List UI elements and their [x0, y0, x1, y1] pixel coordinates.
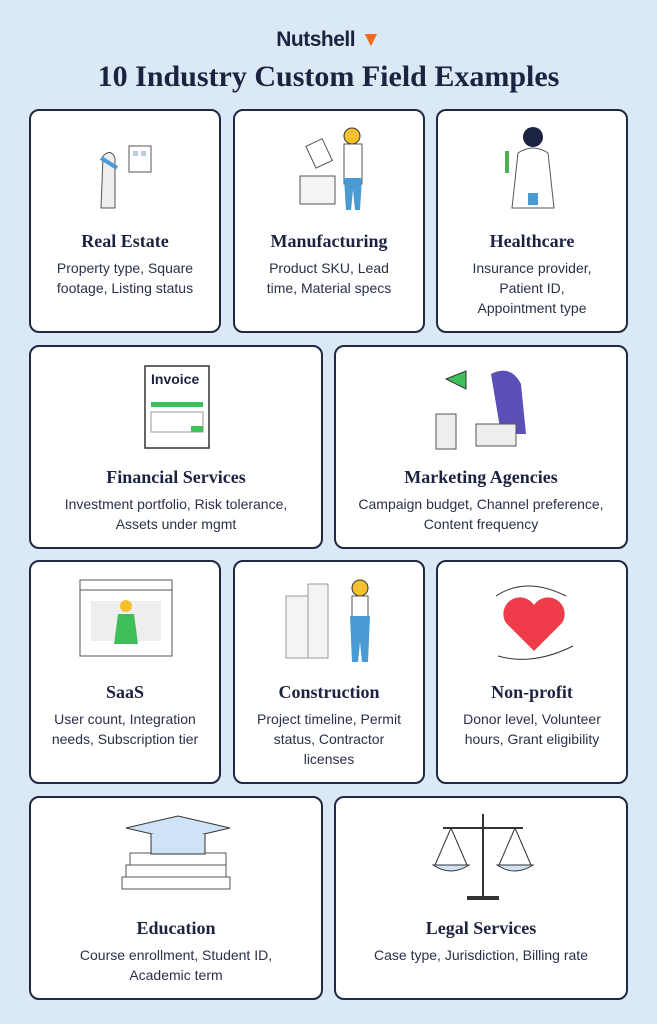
icon: worker [300, 128, 362, 210]
icon: marketer with megaphone [436, 370, 526, 450]
icon: books and cap [122, 816, 230, 890]
panel: manufacturing [233, 109, 425, 333]
text: Property type, Square footage, Listing status [57, 260, 193, 296]
text: Case type, Jurisdiction, Billing rate [374, 947, 588, 963]
icon: heart in hands [496, 586, 574, 660]
icon: worker with buildings [286, 580, 370, 662]
heading: Construction [278, 682, 380, 702]
heading: Manufacturing [270, 231, 388, 251]
icon: invoice: Invoice [151, 371, 199, 387]
panel: legal services [334, 796, 628, 1000]
heading: Legal Services [426, 918, 536, 938]
icon: agent with building [100, 146, 152, 208]
icon: invoice [144, 365, 210, 449]
text: Investment portfolio, Risk tolerance, Assets under mgmt [65, 496, 287, 532]
heading: Marketing Agencies [404, 467, 558, 487]
text: Course enrollment, Student ID, Academic term [80, 947, 272, 983]
heading: Education [136, 918, 216, 938]
text: Insurance provider, Patient ID, Appointment type [472, 260, 592, 316]
panel: financial services [29, 345, 323, 549]
panel: saas [29, 560, 221, 784]
text: Donor level, Volunteer hours, Grant eligibility [463, 711, 601, 747]
panel: education [29, 796, 323, 1000]
title: 10 Industry Custom Field Examples [98, 60, 559, 93]
text: Project timeline, Permit status, Contractor licenses [257, 711, 401, 767]
text: Campaign budget, Channel preference, Content frequency [358, 496, 604, 532]
heading: Non-profit [491, 682, 573, 702]
icon: scales [432, 814, 534, 900]
heading: Financial Services [106, 467, 246, 487]
panel: real estate [29, 109, 221, 333]
panel: non-profit [436, 560, 628, 784]
icon: browser with person [80, 580, 172, 656]
heading: Real Estate [81, 231, 169, 251]
heading: Healthcare [490, 231, 574, 251]
panel: healthcare [436, 109, 628, 333]
heading: SaaS [106, 682, 144, 702]
icon: doctor [505, 127, 555, 208]
text: Product SKU, Lead time, Material specs [267, 260, 391, 296]
panel: marketing agencies [334, 345, 628, 549]
logo: Nutshell ▼ [276, 28, 381, 51]
panel: construction [233, 560, 425, 784]
text: User count, Integration needs, Subscription tier [52, 711, 198, 747]
